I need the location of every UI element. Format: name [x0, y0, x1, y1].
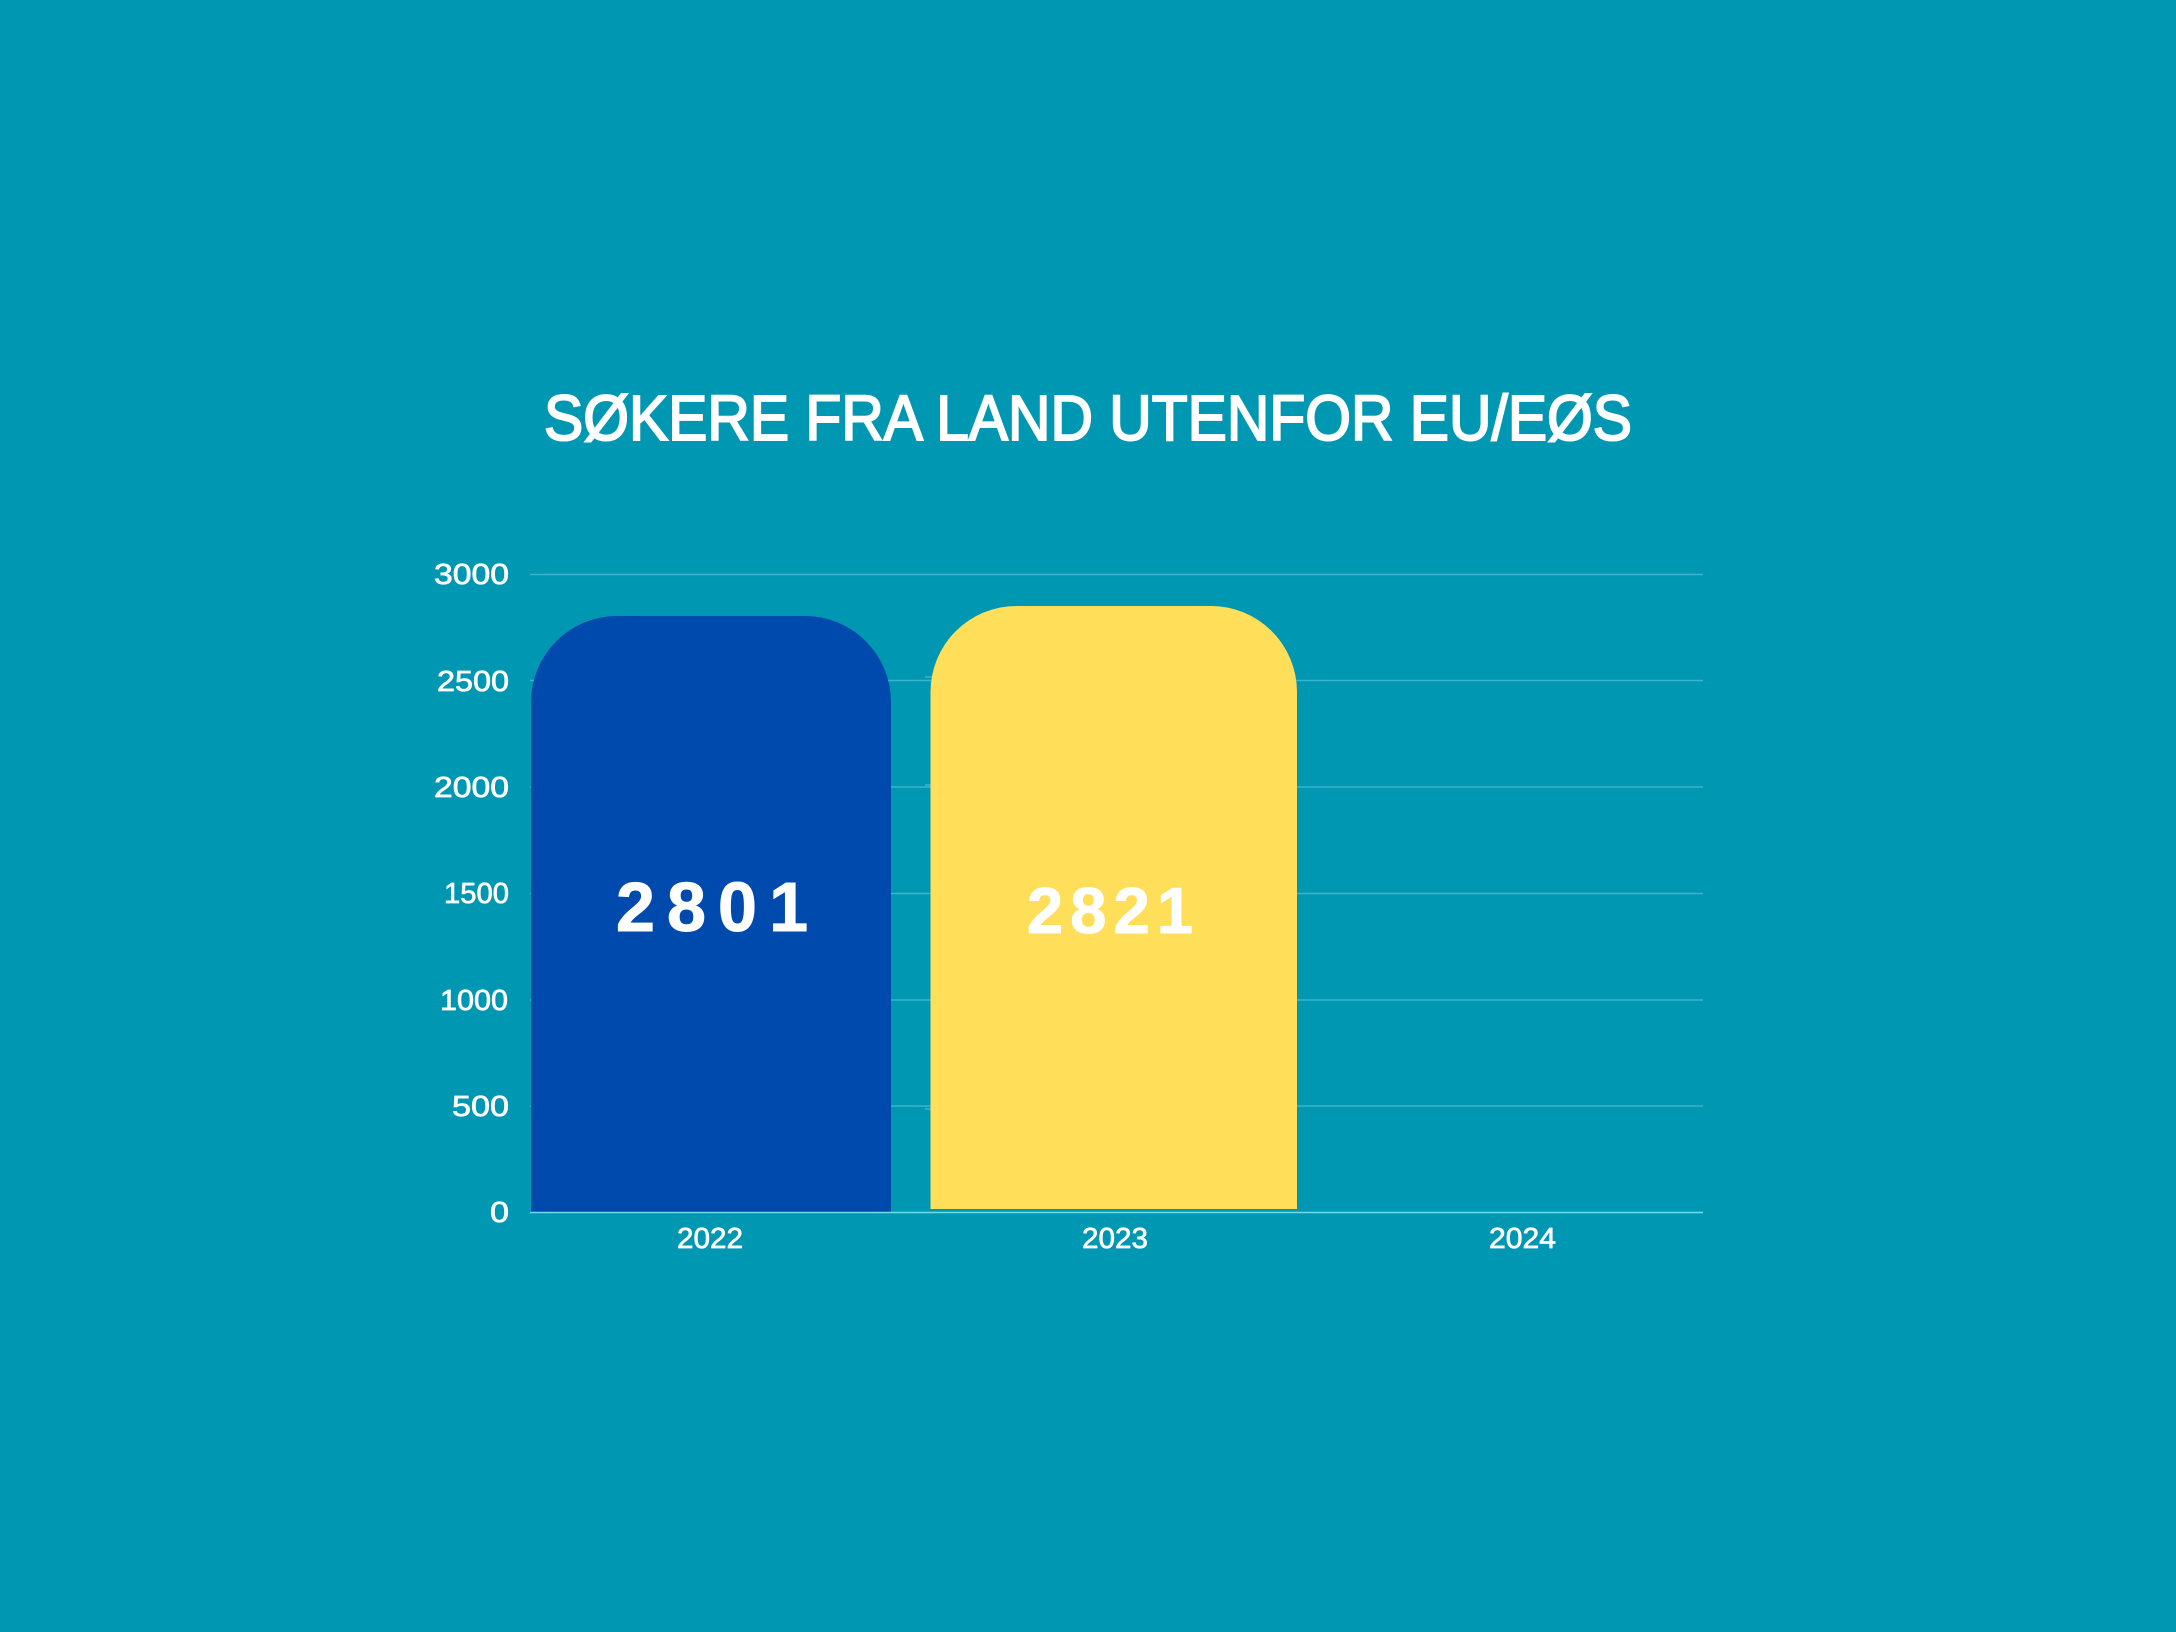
x axis labels: 2022	[677, 1223, 743, 1255]
y axis labels: 2500	[437, 666, 509, 698]
x axis labels: 2023	[1082, 1223, 1148, 1255]
y axis labels: 1000	[440, 985, 508, 1017]
x axis labels: 2024	[1489, 1223, 1556, 1255]
y axis labels: 1500	[444, 878, 509, 910]
bar: 2022	[531, 616, 891, 1212]
y axis labels: 0	[490, 1197, 509, 1229]
y axis labels: 500	[452, 1091, 509, 1123]
y axis labels	[434, 559, 509, 1229]
x axis labels	[677, 1223, 1556, 1255]
y axis labels: 3000	[434, 559, 509, 591]
bar chart	[434, 559, 1703, 1255]
value: 2801: 2801	[616, 868, 808, 946]
y axis labels: 2000	[434, 772, 509, 804]
value: 2821: 2821	[1027, 874, 1193, 947]
bar: 2023	[930, 606, 1297, 1209]
x axis baseline	[530, 1212, 1703, 1214]
title: SØKERE FRA LAND UTENFOR EU/EØS	[544, 382, 1632, 454]
